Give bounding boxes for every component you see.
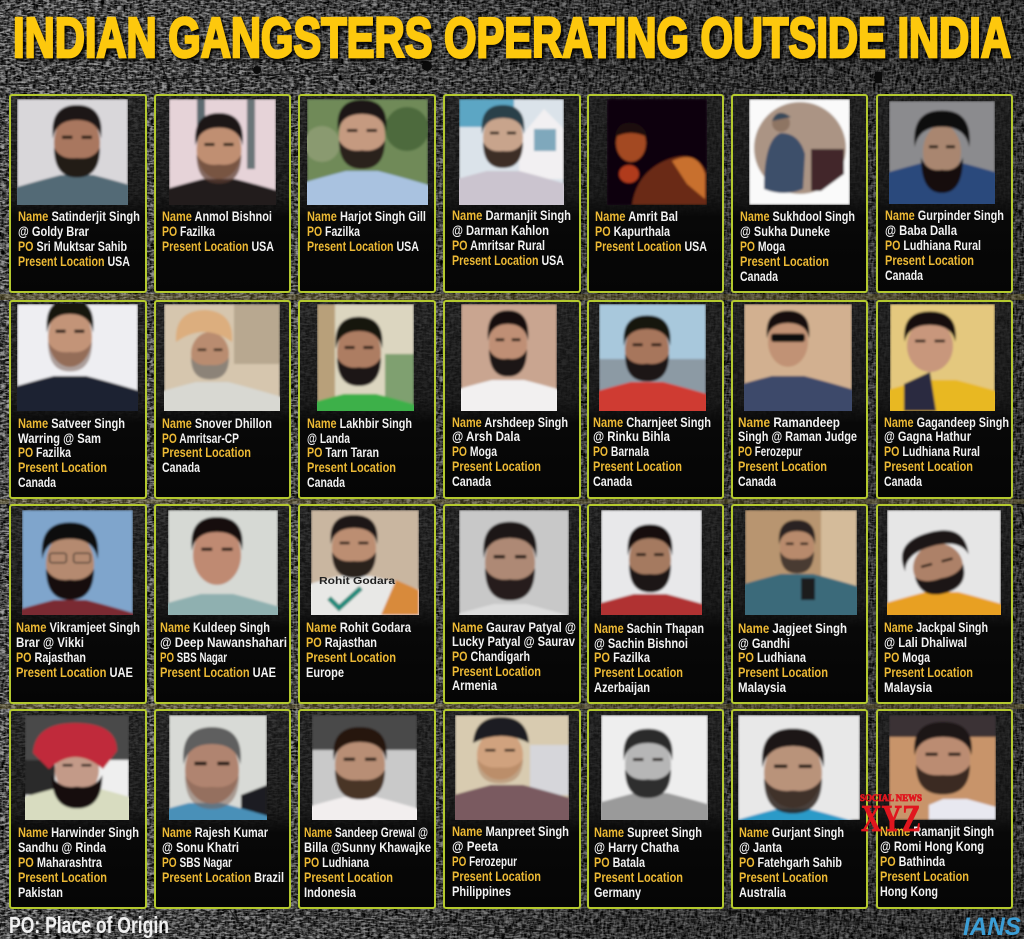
portrait: Jagjeet Singh [745,510,857,615]
text: Satinderjit Singh: Present Location USA [18,253,130,269]
text: Harwinder Singh [18,824,139,900]
text: Jagjeet Singh: PO Ludhiana [738,649,806,665]
text: Harjot Singh Gill: Name Harjot Singh Gill [307,208,426,224]
text: Rohit Godara: Europe [306,664,344,680]
text: Jagjeet Singh [738,620,847,695]
portrait: Snover Dhillon [164,304,280,411]
portrait: Satveer Singh [17,304,138,411]
text: Ramanjit Singh: Hong Kong [880,883,938,899]
panel: Arshdeep Singh [428,301,588,498]
text: Sachin Thapan: Azerbaijan [594,679,650,695]
footnote: PO: Place of Origin [9,912,169,938]
text: Ramandeep Singh: PO Ferozepur [738,443,802,459]
text: Ramandeep Singh: Singh @ Raman Judge [738,428,857,444]
text: Gurjant Singh: @ Janta [739,839,782,855]
text: Satinderjit Singh: Name Satinderjit Singh [18,208,140,224]
panel: Rohit Godara [275,505,435,703]
text: Gurpinder Singh: Canada [885,267,923,283]
text: Arshdeep Singh [452,414,568,489]
text: Satveer Singh: Present Location [18,459,107,475]
text: Anmol Bishnoi: Present Location USA [162,238,274,254]
portrait: Kuldeep Singh [168,510,278,615]
text: Satinderjit Singh: @ Goldy Brar [18,223,89,239]
text: Jagjeet Singh: Name Jagjeet Singh [738,620,847,636]
panel: Satinderjit Singh [0,95,157,292]
text: Darmanjit Singh: Present Location USA [452,252,564,268]
text: Manpreet Singh [452,823,569,899]
panel: Gurjant Singh [713,710,873,908]
portrait: Supreet Singh [601,715,708,820]
text: Gurpinder Singh [885,207,1004,283]
watermark [860,793,922,840]
text: Ramanjit Singh: Present Location [880,868,969,884]
text: Kuldeep Singh: Name Kuldeep Singh [160,619,270,635]
text: Darmanjit Singh: @ Darman Kahlon [452,222,549,238]
text: Satveer Singh: Warring @ Sam [18,430,101,446]
text: Gagandeep Singh: PO Ludhiana Rural [884,443,980,459]
portrait: Rajesh Kumar [169,715,267,820]
text: Gaurav Patyal: Present Location [452,663,541,679]
text: Gurjant Singh [739,824,844,900]
text: Gagandeep Singh [884,414,1009,489]
portrait: Gurpinder Singh [889,101,995,204]
text: Ramanjit Singh [880,823,994,899]
text: Jagjeet Singh: @ Gandhi [738,635,790,651]
portrait: Lakhbir Singh [317,304,414,411]
text: Vikramjeet Singh: Brar @ Vikki [16,634,84,650]
panel: Gagandeep Singh [860,301,1020,498]
text: Jackpal Singh: Name Jackpal Singh [884,619,988,635]
portrait: Rohit Godara: Rohit Godara [319,576,396,587]
panel: Sachin Thapan [570,505,730,703]
panel: Harjot Singh Gill [282,95,442,292]
text: Lakhbir Singh: @ Landa [307,430,350,446]
text: Arshdeep Singh: Present Location [452,458,541,474]
text: Vikramjeet Singh [16,619,140,680]
text: Ramandeep Singh [738,414,857,489]
panel: Gurpinder Singh [862,95,1022,292]
text: Harwinder Singh: PO Maharashtra [18,854,102,870]
text: Harjot Singh Gill: Present Location USA [307,238,419,254]
text: Sachin Thapan: Name Sachin Thapan [594,620,704,636]
text: Jackpal Singh [884,619,988,695]
text: Darmanjit Singh: Name Darmanjit Singh [452,207,571,223]
text: Sandeep Grewal: Present Location [304,869,393,885]
panel: Sukhdool Singh [732,95,867,292]
text: Vikramjeet Singh: Name Vikramjeet Singh [16,619,140,635]
text: Arshdeep Singh: Canada [452,473,491,489]
text: Sandeep Grewal [304,824,431,900]
panel: Manpreet Singh [427,710,587,908]
panel: Jackpal Singh [862,505,1022,703]
text: Amrit Bal: Name Amrit Bal [595,208,678,224]
text: Sandeep Grewal: PO Ludhiana [304,854,369,870]
text: Charnjeet Singh: PO Barnala [593,443,649,459]
text: Jagjeet Singh: Present Location [738,664,828,680]
portrait: Arshdeep Singh [461,304,557,411]
panel: Darmanjit Singh [423,95,583,292]
text: Manpreet Singh: @ Peeta [452,838,498,854]
text: Rohit Godara: Present Location [306,649,396,665]
text: Vikramjeet Singh: Present Location UAE [16,664,133,680]
text: Supreet Singh: Germany [594,884,641,900]
text: Anmol Bishnoi: Name Anmol Bishnoi [162,208,272,224]
text: Sukhdool Singh [740,208,855,284]
text: Satveer Singh: Name Satveer Singh [18,415,125,431]
text: Kuldeep Singh [160,619,287,680]
text: Rajesh Kumar: @ Sonu Khatri [162,839,239,855]
text: Gaurav Patyal: PO Chandigarh [452,648,530,664]
text: Snover Dhillon: Name Snover Dhillon [162,415,272,431]
text: Gaurav Patyal [452,619,576,693]
text: Manpreet Singh: Present Location [452,868,541,884]
text: Ramanjit Singh: Name Ramanjit Singh [880,823,994,839]
portrait: Vikramjeet Singh [22,510,133,615]
panel: Supreet Singh [571,710,731,908]
text: Rohit Godara: PO Rajasthan [306,634,377,650]
text: Amrit Bal: PO Kapurthala [595,223,670,239]
panel: Kuldeep Singh [137,505,297,703]
text: Supreet Singh: @ Harry Chatha [594,839,679,855]
text: Charnjeet Singh: Present Location [593,458,682,474]
panel: Gaurav Patyal [430,505,590,703]
portrait: Charnjeet Singh [599,304,706,411]
text: Lakhbir Singh [307,415,412,490]
text: Supreet Singh: PO Batala [594,854,645,870]
text: Ramanjit Singh: @ Romi Hong Kong [880,838,984,854]
text: Jagjeet Singh: Malaysia [738,679,786,695]
text: Rajesh Kumar: Present Location Brazil [162,869,284,885]
text: Ramandeep Singh: Present Location [738,458,827,474]
text: Sukhdool Singh: Present Location [740,253,829,269]
text: Snover Dhillon: Present Location [162,444,251,460]
text: Arshdeep Singh: Name Arshdeep Singh [452,414,568,430]
text: Darmanjit Singh [452,207,571,268]
text: Gaurav Patyal: Name Gaurav Patyal @ [452,619,576,635]
panel: Harwinder Singh [0,710,157,908]
text: Supreet Singh [594,824,702,900]
text: Charnjeet Singh: Name Charnjeet Singh [593,414,711,430]
portrait: Harjot Singh Gill [307,99,428,205]
text: Rajesh Kumar: PO SBS Nagar [162,854,232,870]
text: Gurpinder Singh: @ Baba Dalla [885,222,957,238]
portrait: Satinderjit Singh [17,99,128,205]
panel: Sandeep Grewal [280,710,440,908]
text: Amrit Bal: Present Location USA [595,238,707,254]
text: Sachin Thapan: Present Location [594,664,683,680]
portrait: Rohit Godara [311,510,419,615]
text: Harwinder Singh: Name Harwinder Singh [18,824,139,840]
text: Lakhbir Singh: Name Lakhbir Singh [307,415,412,431]
text: Gurjant Singh: Present Location [739,869,828,885]
text: Gurpinder Singh: Present Location [885,252,974,268]
portrait: Sachin Thapan [601,510,702,615]
text: Rohit Godara: Name Rohit Godara [306,619,411,635]
text: Snover Dhillon [162,415,272,475]
panel: Charnjeet Singh [567,301,727,498]
panel: Rajesh Kumar [125,710,290,908]
text: Sandeep Grewal: Name Sandeep Grewal @ [304,824,428,840]
text: Gagandeep Singh: Canada [884,473,922,489]
text: Lakhbir Singh: Present Location [307,459,396,475]
text: Ramandeep Singh: Name Ramandeep [738,414,840,430]
text: Arshdeep Singh: @ Arsh Dala [452,428,520,444]
panel: Ramandeep Singh [708,301,868,498]
text: Gaurav Patyal: Armenia [452,677,497,693]
text: Lakhbir Singh: PO Tarn Taran [307,444,379,460]
text: Ramandeep Singh: Canada [738,473,776,489]
text: Harwinder Singh: Present Location [18,869,107,885]
portrait: Manpreet Singh [455,715,569,820]
panel: Snover Dhillon [132,301,292,498]
text: Rajesh Kumar: Name Rajesh Kumar [162,824,268,840]
portrait: Harwinder Singh [25,715,129,820]
text: Sachin Thapan: @ Sachin Bishnoi [594,635,688,651]
portrait: Sandeep Grewal [312,715,417,820]
text: Satveer Singh: Canada [18,474,56,490]
text: Jackpal Singh: PO Moga [884,649,930,665]
text: Gurjant Singh: PO Fatehgarh Sahib [739,854,842,870]
portrait: Darmanjit Singh [459,99,564,205]
portrait: Ramandeep Singh [744,304,852,411]
text: Gurjant Singh: Australia [739,884,786,900]
text: Manpreet Singh: PO Ferozepur [452,853,517,869]
text: Ramanjit Singh: PO Bathinda [880,853,945,869]
text: Vikramjeet Singh: PO Rajasthan [16,649,86,665]
text: Arshdeep Singh: PO Moga [452,443,497,459]
text: Harwinder Singh: Sandhu @ Rinda [18,839,106,855]
panel: Satveer Singh [0,299,150,498]
portrait: Gurjant Singh [738,715,860,820]
text: Charnjeet Singh: Canada [593,473,632,489]
text: Sukhdool Singh: Canada [740,268,778,284]
portrait: Gaurav Patyal [459,510,569,615]
text: Sachin Thapan [594,620,704,695]
portrait: Jackpal Singh [887,510,1001,615]
text: Supreet Singh: Name Supreet Singh [594,824,702,840]
panel: Ramanjit Singh [877,710,1012,908]
text: Gurjant Singh: Name Gurjant Singh [739,824,844,840]
panel: Lakhbir Singh [280,301,440,498]
text: Kuldeep Singh: @ Deep Nawanshahari [160,634,287,650]
text: Harjot Singh Gill: PO Fazilka [307,223,360,239]
text: Charnjeet Singh: @ Rinku Bihla [593,428,670,444]
text: Harwinder Singh: Pakistan [18,884,63,900]
text: Rohit Godara [306,619,411,680]
text: Anmol Bishnoi: PO Fazilka [162,223,215,239]
text: Charnjeet Singh [593,414,711,489]
text: Sukhdool Singh: @ Sukha Duneke [740,223,830,239]
text: Harjot Singh Gill [307,208,426,254]
text: Satveer Singh: PO Fazilka [18,444,71,460]
text: Lakhbir Singh: Canada [307,474,345,490]
text: Snover Dhillon: Canada [162,459,200,475]
panel: Vikramjeet Singh [0,505,150,703]
text: Gagandeep Singh: @ Gagna Hathur [884,428,971,444]
text: Manpreet Singh: Name Manpreet Singh [452,823,569,839]
text: Sukhdool Singh: Name Sukhdool Singh [740,208,855,224]
portrait: Amrit Bal [607,99,707,205]
text: Gurpinder Singh: PO Ludhiana Rural [885,237,981,253]
text: Kuldeep Singh: PO SBS Nagar [160,649,227,665]
watermark: SOCIAL NEWS [860,793,922,803]
text: Supreet Singh: Present Location [594,869,683,885]
portrait: Ramanjit Singh [889,715,996,820]
panel: Anmol Bishnoi [139,95,299,292]
text: Sandeep Grewal: Indonesia [304,884,356,900]
text: Jackpal Singh: @ Lali Dhaliwal [884,634,967,650]
text: Sachin Thapan: PO Fazilka [594,649,650,665]
text: Darmanjit Singh: PO Amritsar Rural [452,237,545,253]
text: Rajesh Kumar [162,824,284,885]
portrait: Gagandeep Singh [890,304,995,411]
text: Anmol Bishnoi [162,208,274,254]
text: Satveer Singh [18,415,125,490]
text: Snover Dhillon: PO Amritsar-CP [162,430,239,446]
watermark: XYZ [861,798,921,840]
text: Amrit Bal [595,208,707,254]
text: Gagandeep Singh: Present Location [884,458,973,474]
text: Sandeep Grewal: Billa @Sunny Khawajke [304,839,431,855]
text: Jackpal Singh: Present Location [884,664,973,680]
panel: Jagjeet Singh [717,505,877,703]
text: Satinderjit Singh: PO Sri Muktsar Sahib [18,238,127,254]
text: Manpreet Singh: Philippines [452,883,511,899]
portrait: Anmol Bishnoi [169,99,276,205]
text: Gaurav Patyal: Lucky Patyal @ Saurav [452,633,575,649]
text: Sukhdool Singh: PO Moga [740,238,785,254]
panel: Amrit Bal [588,95,723,292]
portrait: Sukhdool Singh [749,99,850,205]
text: Jackpal Singh: Malaysia [884,679,932,695]
text: Satinderjit Singh [18,208,140,269]
text: Kuldeep Singh: Present Location UAE [160,664,276,680]
